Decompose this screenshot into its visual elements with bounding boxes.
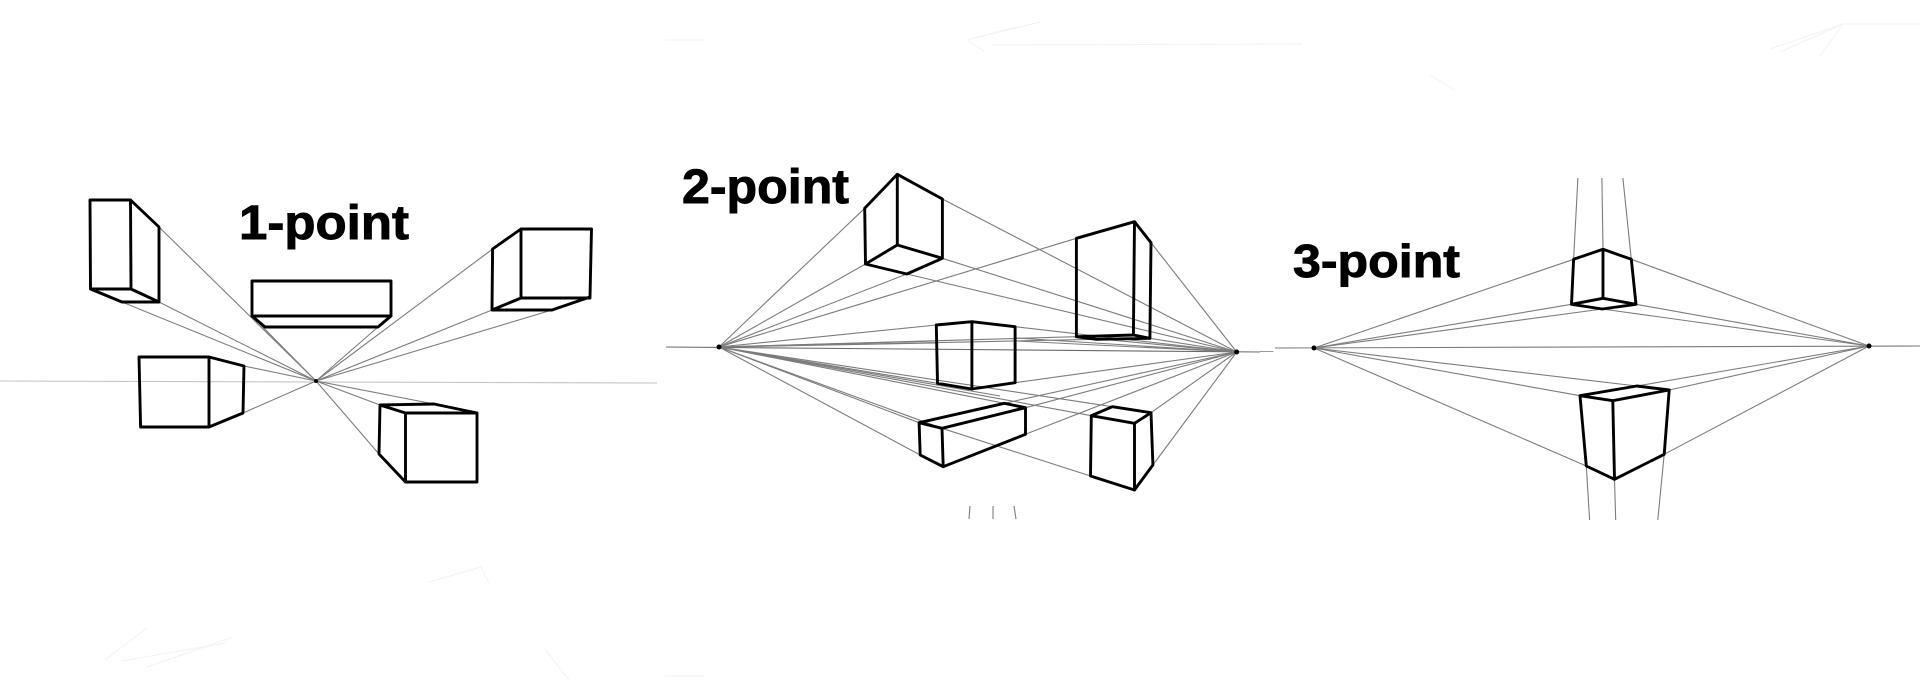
box: lower right	[1090, 407, 1153, 490]
vertical ticks below 2-point	[969, 506, 1016, 519]
vanishing point: 2-point left	[716, 344, 722, 350]
vanishing point: 3-point right	[1866, 344, 1872, 348]
box: long lower	[919, 403, 1026, 467]
construction lines to right vanishing point	[907, 199, 1237, 465]
short horizon stub	[1260, 350, 1274, 352]
vanishing point: 2-point right	[1234, 350, 1239, 354]
box: upper left	[90, 200, 159, 302]
heading: 2-point: 2-point	[682, 161, 849, 214]
box: tall right	[1076, 222, 1151, 339]
horizon line: 2-point	[666, 347, 1260, 352]
box: centre above vanishing point	[252, 281, 391, 327]
panel: 1-point perspective	[0, 197, 657, 482]
panel: 2-point perspective	[666, 161, 1260, 519]
construction lines: vertical vanishing	[1574, 178, 1664, 520]
construction lines to vanishing points	[1314, 259, 1869, 466]
horizon line: 1-point	[0, 381, 657, 383]
box: left	[139, 357, 244, 427]
box: top	[865, 174, 942, 274]
heading: 3-point: 3-point	[1293, 235, 1460, 287]
box: upper right	[492, 229, 592, 310]
heading: 1-point: 1-point	[239, 197, 409, 250]
box: centre on horizon	[936, 322, 1015, 389]
construction lines to vanishing point	[122, 227, 552, 454]
horizon line: 3-point	[1275, 346, 1920, 348]
construction lines to left vanishing point	[719, 208, 1112, 476]
box: above horizon	[1572, 249, 1636, 309]
box: lower right	[379, 404, 477, 482]
panel: 3-point perspective	[1260, 178, 1920, 520]
vanishing point: 1-point	[314, 379, 318, 383]
box: below horizon	[1580, 386, 1669, 479]
vanishing point: 3-point left	[1312, 346, 1316, 350]
